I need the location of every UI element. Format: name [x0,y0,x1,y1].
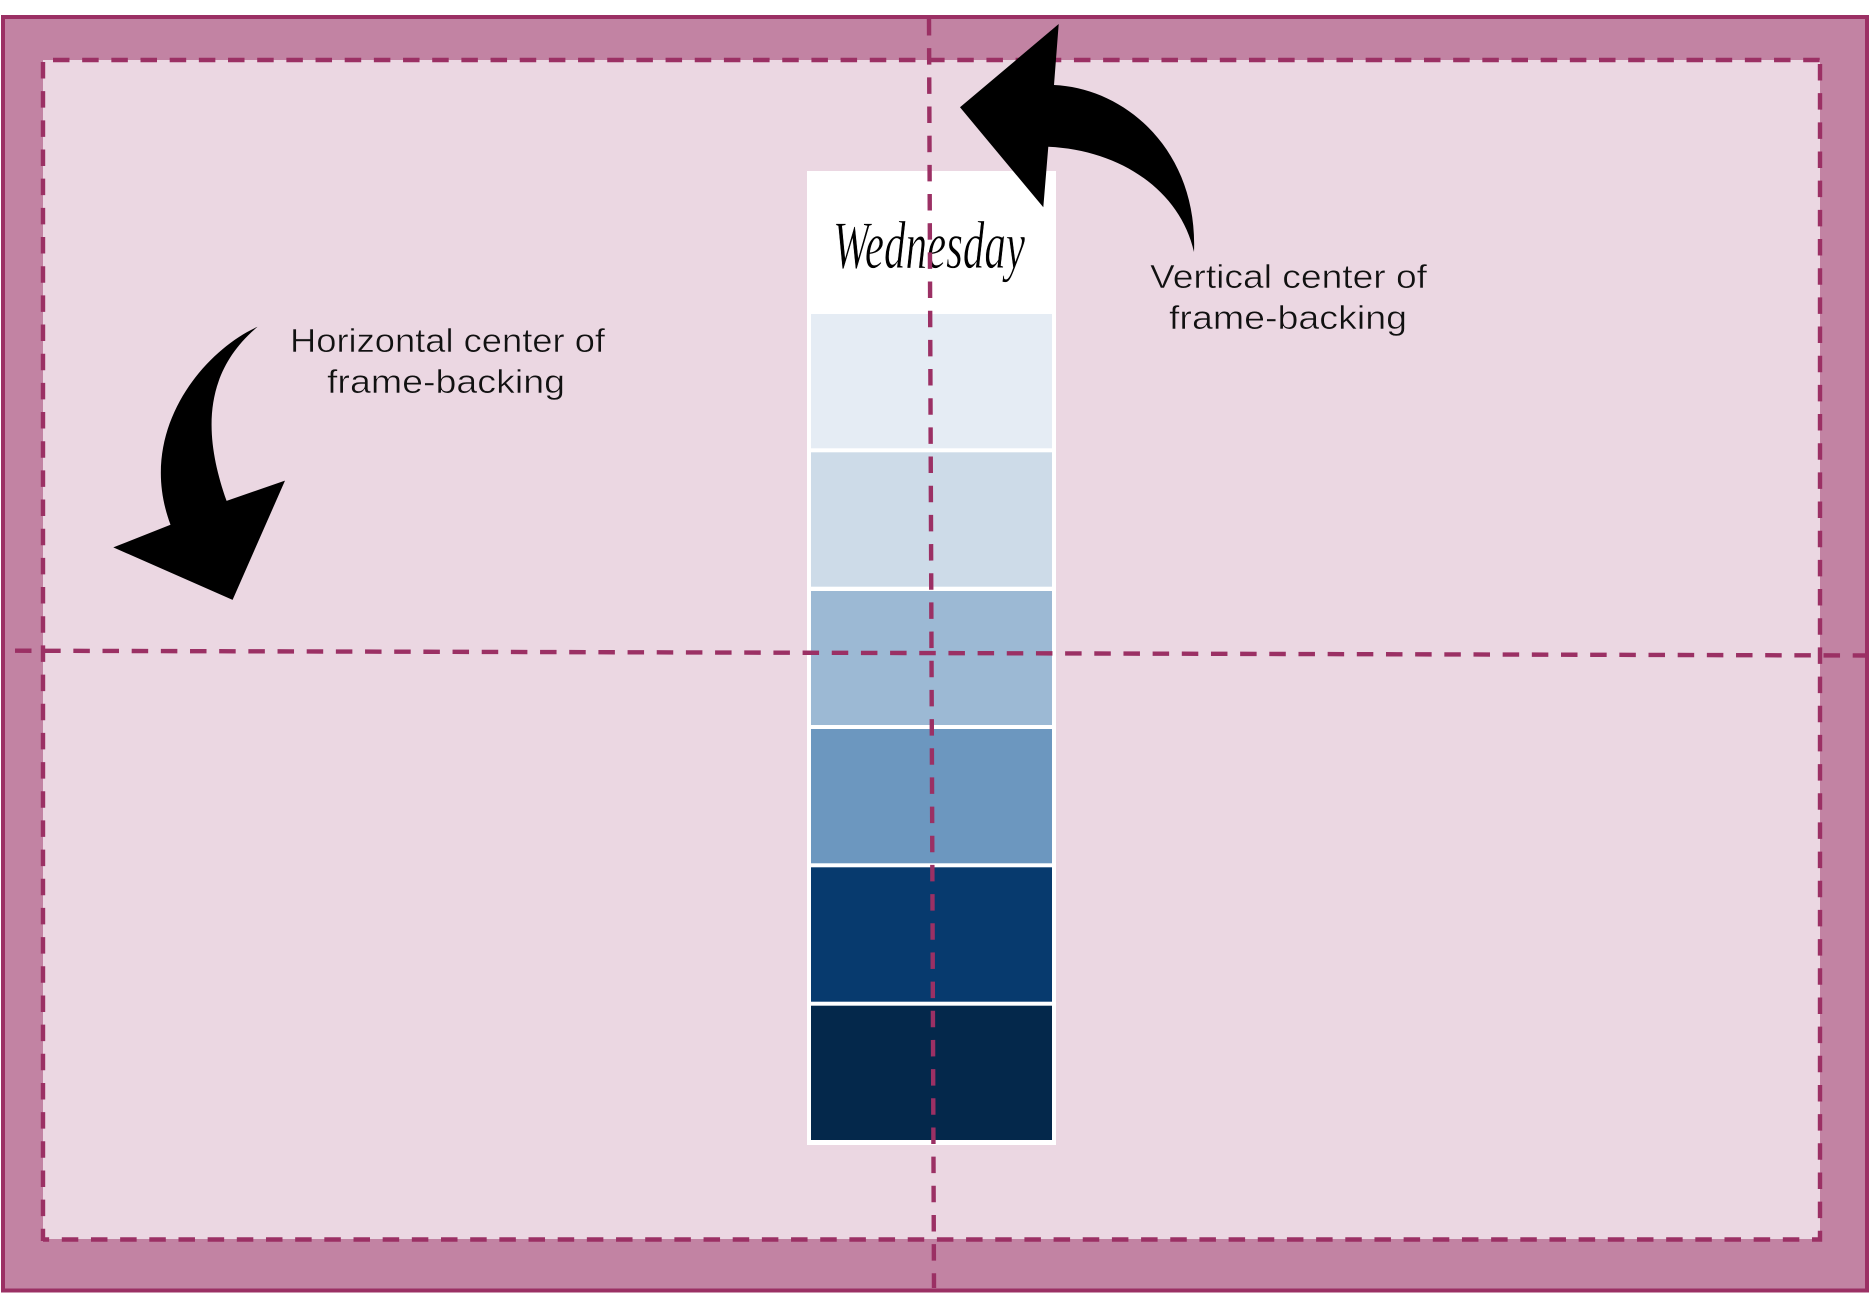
swatch 4 [811,729,1052,863]
arrow: pointing to vertical center [960,24,1194,252]
text: vertical center label: Vertical center of [1150,258,1428,295]
card background [807,171,1056,1145]
swatch 5 [811,867,1052,1002]
swatch 3 [811,591,1052,725]
text: horizontal center label: Horizontal center of [290,322,606,359]
horizontal center dashed line [15,651,1869,656]
swatch 2 [811,452,1052,587]
text: horizontal center label: frame-backing [327,363,565,400]
text: vertical center label: frame-backing [1169,299,1407,336]
vertical center dashed line [929,19,934,1288]
panel: Wednesday colour strip [807,171,1056,1145]
swatch 1 [811,314,1052,448]
arrow: pointing to horizontal center [113,327,285,600]
text: horizontal center label [290,322,606,400]
heading: Wednesday: Wednesday [833,207,1026,283]
swatch 6 [811,1006,1052,1140]
text: vertical center label [1150,258,1428,336]
